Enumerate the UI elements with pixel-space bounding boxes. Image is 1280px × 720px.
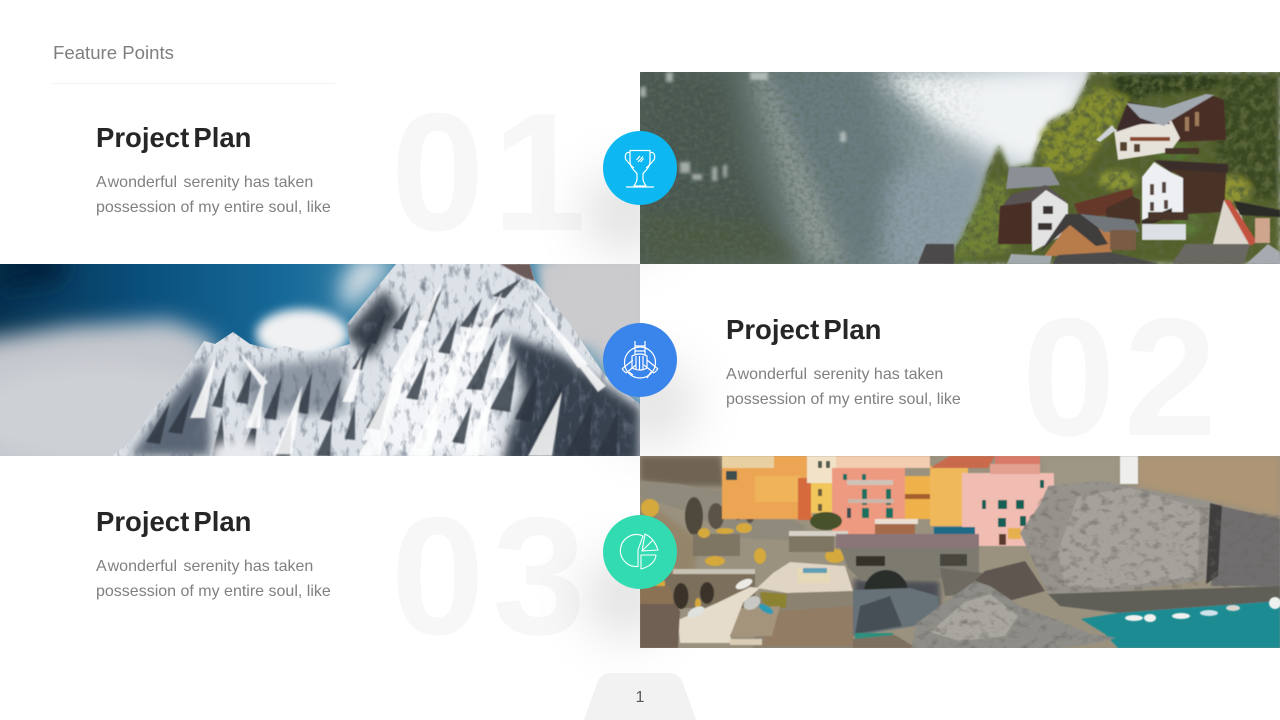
photo: snow mountain <box>0 264 640 456</box>
text block 1 <box>96 122 331 216</box>
text block 3 <box>96 506 331 600</box>
quay <box>1048 586 1280 613</box>
text block 2: Project Plan <box>726 314 881 345</box>
dark rocks under bridge <box>853 588 940 636</box>
text block 3: possession of my entire soul, like <box>96 583 331 600</box>
crowd and bridge <box>789 536 834 552</box>
page number tab: 1 <box>636 689 644 706</box>
text block 2: possession of my entire soul, like <box>726 391 961 408</box>
number 03: 03 <box>391 482 594 670</box>
foreground rocks <box>912 581 1116 648</box>
text block 3: A wonderful serenity has taken <box>96 558 313 575</box>
cliffs <box>1020 481 1215 593</box>
icon: trophy badge <box>603 131 677 205</box>
number 02: 02 <box>1022 283 1225 471</box>
text block 1: possession of my entire soul, like <box>96 199 331 216</box>
walkway <box>730 606 780 636</box>
text block 1: A wonderful serenity has taken <box>96 174 313 191</box>
text block 3: Project Plan <box>96 506 251 537</box>
icon: pie chart badge <box>603 515 677 589</box>
heading: feature points: Feature Points <box>53 42 174 63</box>
number 01: 01 <box>391 78 594 266</box>
page number tab <box>584 673 696 720</box>
stone walls and hillside <box>640 456 1280 621</box>
sea <box>1081 601 1280 648</box>
buildings <box>722 456 812 519</box>
promenade and wall <box>757 562 853 593</box>
photo: alpine village <box>640 72 1280 264</box>
text block 1: Project Plan <box>96 122 251 153</box>
text block 2 <box>726 314 961 408</box>
photo: coastal village <box>640 456 1280 648</box>
icon: joined hands badge <box>603 323 677 397</box>
text block 2: A wonderful serenity has taken <box>726 366 943 383</box>
